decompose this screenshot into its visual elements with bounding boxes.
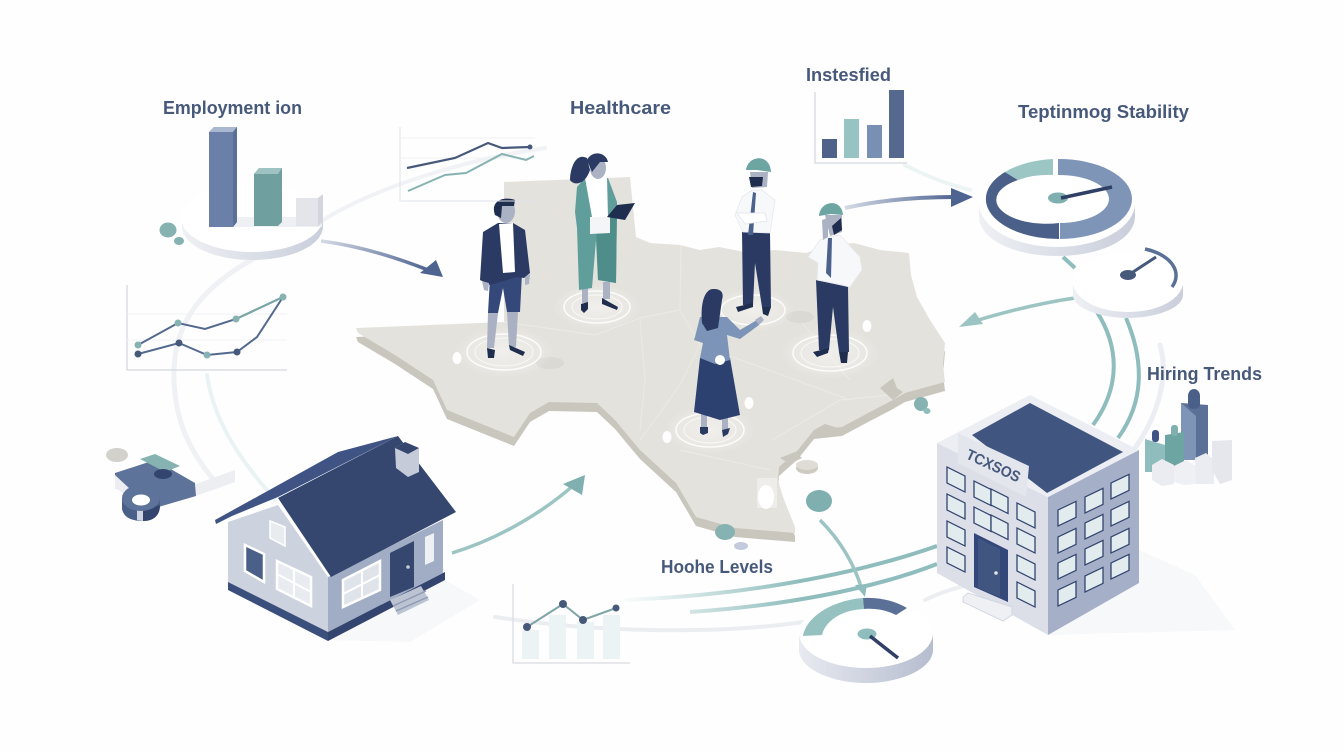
glow drops on map — [452, 320, 872, 509]
door — [390, 541, 414, 597]
arcs from building to hiring gauges — [1063, 257, 1139, 438]
left wall — [228, 505, 328, 632]
line chart: healthcare — [400, 127, 535, 201]
hiring trends isometric blocks — [1145, 389, 1232, 486]
heading: Hiring Trends: Hiring Trends — [1147, 364, 1262, 384]
faint connecting rings — [174, 148, 1163, 630]
roof main — [278, 436, 456, 577]
right windows — [1058, 474, 1129, 606]
sign — [958, 433, 1029, 497]
bar chart: instesfied — [815, 90, 907, 163]
side window — [425, 533, 434, 565]
map surface — [356, 177, 945, 533]
sign text: TCXSOS — [963, 446, 1023, 486]
line chart: left — [127, 285, 287, 370]
arrow: engineer to stability gauge — [845, 188, 973, 208]
roof parapet — [937, 395, 1139, 497]
foundation — [228, 582, 328, 641]
house — [215, 436, 456, 641]
large white window — [277, 561, 311, 606]
arrow: small gauge to map — [959, 298, 1075, 327]
heading: Employment ion: Employment ion — [163, 98, 302, 118]
location rings — [454, 284, 880, 454]
navy window — [245, 545, 264, 582]
person: engineer hand on chin — [808, 203, 862, 363]
building — [937, 395, 1139, 635]
map extrusion — [356, 186, 945, 542]
person: engineer arms crossed — [735, 158, 775, 316]
attic window — [270, 521, 285, 546]
key-like isometric figure — [106, 448, 235, 521]
coastal inlets — [780, 378, 903, 464]
roof — [972, 403, 1123, 493]
gauge: stability — [979, 159, 1135, 256]
right face — [1048, 450, 1139, 635]
gauge: small — [1073, 249, 1183, 318]
front window — [343, 561, 380, 607]
arrow: house to map — [452, 475, 585, 553]
door — [974, 533, 1008, 602]
heading: Instesfied: Instesfied — [806, 65, 891, 85]
arrow: employment to map — [321, 241, 443, 277]
left windows — [947, 467, 1035, 607]
heading: Healthcare: Healthcare — [570, 98, 671, 118]
right wall — [328, 520, 443, 632]
soft map shadows — [536, 311, 814, 369]
gauge: housing levels — [799, 598, 933, 683]
person: man in navy jacket and shorts — [480, 199, 530, 358]
porch steps — [390, 586, 429, 615]
arrow: map to bottom gauge — [820, 520, 867, 597]
ground shadows — [328, 550, 1235, 642]
person: woman in skirt, arm raised — [694, 289, 764, 437]
heading: Teptinmog Stability: Teptinmog Stability — [1018, 102, 1189, 122]
employment 3D bar chart on platform — [181, 127, 323, 260]
chart: bottom line and bars — [513, 584, 630, 663]
person: woman in teal with tablet — [570, 153, 635, 313]
pebbles on the coast — [715, 397, 930, 550]
county lines — [504, 245, 890, 470]
roof gable — [215, 436, 398, 524]
arcs from building to bottom chart — [620, 546, 937, 612]
chimney — [395, 442, 419, 477]
pebbles by employment chart — [160, 222, 184, 245]
left face — [937, 443, 1048, 635]
steps — [963, 593, 1012, 621]
map: Texas — [356, 177, 945, 542]
heading: Hoohe Levels: Hoohe Levels — [661, 557, 773, 577]
